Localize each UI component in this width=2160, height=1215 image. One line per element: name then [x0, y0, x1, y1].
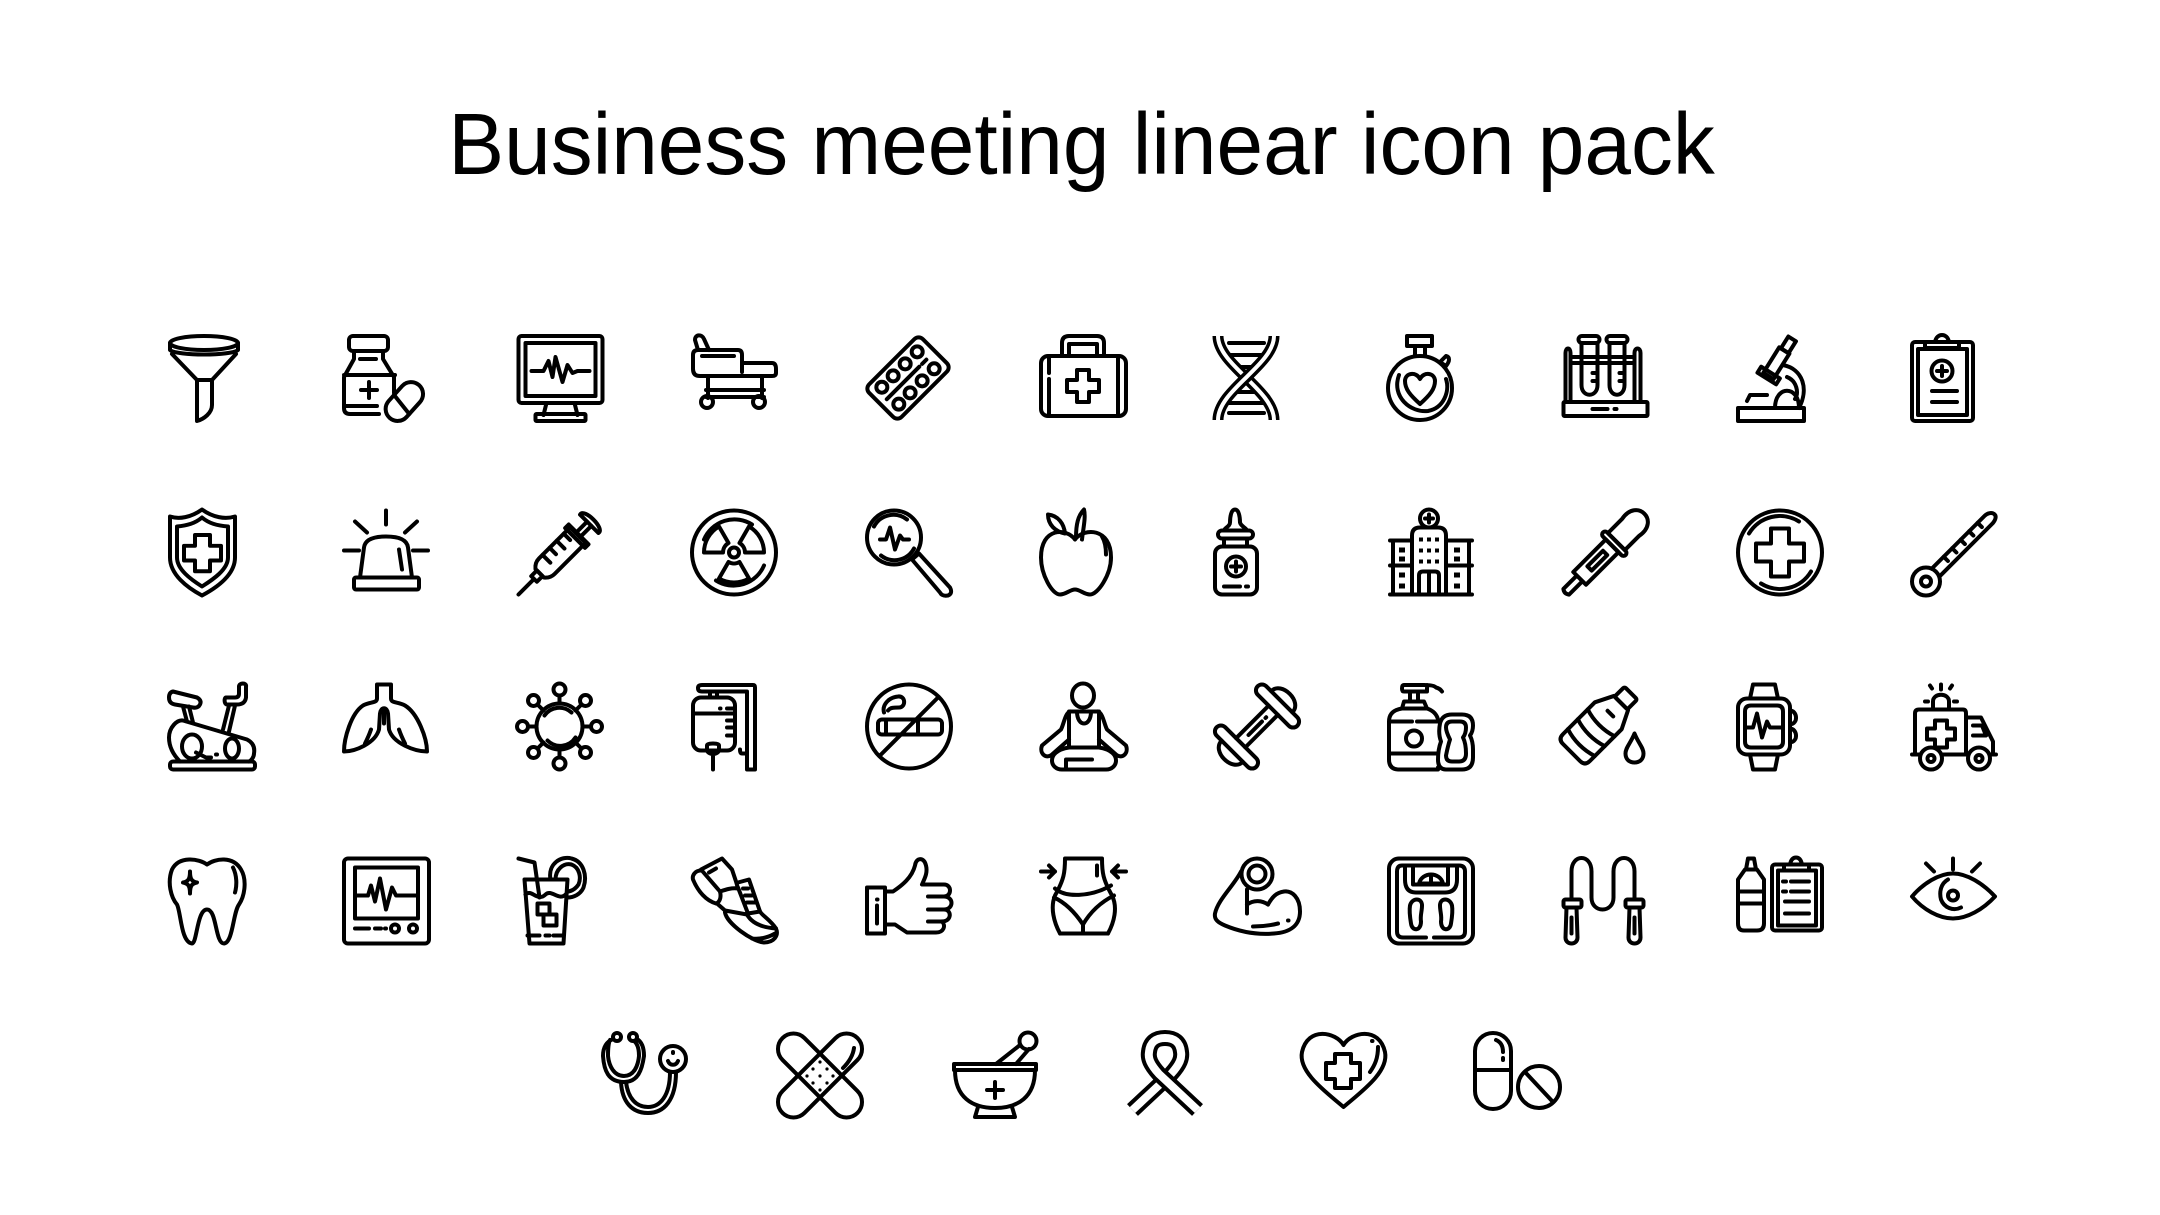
icon: medicine bottle and capsule	[344, 336, 428, 426]
icon: water bottle and checklist	[1738, 858, 1822, 930]
icon: flexed bicep	[1215, 858, 1300, 934]
icon: apple	[1041, 510, 1111, 594]
icon: meditation yoga	[1041, 684, 1127, 770]
icon: first aid kit	[1041, 336, 1126, 416]
icon: lungs	[344, 684, 427, 752]
icon: stethoscope	[603, 1033, 686, 1113]
icon: virus	[517, 684, 602, 770]
icon: dropper bottle	[1215, 510, 1257, 594]
icon: jump rope	[1564, 858, 1644, 944]
icon: microscope	[1738, 333, 1804, 421]
icon: funnel	[170, 336, 238, 421]
icon: thermometer	[1906, 504, 2004, 601]
icon: soap and sponge	[1389, 685, 1473, 770]
icon: medical shield	[170, 510, 235, 596]
icon: lemonade drink	[518, 858, 585, 944]
icon: eye	[1912, 858, 1995, 918]
icon: bathroom scale	[1389, 858, 1473, 944]
icon: mortar and pestle	[954, 1032, 1036, 1117]
icon: tooth	[170, 859, 245, 944]
icon: plus in circle	[1738, 510, 1822, 594]
icon: medical clipboard	[1912, 335, 1973, 421]
icon: capsule and tablet	[1475, 1033, 1560, 1109]
icon: ambulance	[1912, 684, 1996, 770]
icon: running shoe	[693, 858, 777, 942]
icon: smartwatch	[1738, 684, 1796, 770]
icon: heart with cross	[1302, 1034, 1385, 1107]
icon: syringe	[509, 510, 603, 604]
icon: heart monitor screen	[518, 336, 602, 421]
icon: ECG device	[344, 858, 429, 944]
icon: blister pack of pills	[865, 335, 951, 421]
icon: no smoking	[867, 684, 951, 768]
icon: water bottle with drop	[1558, 680, 1644, 766]
icon: test tubes in rack	[1564, 336, 1648, 416]
icon: pipette dropper	[1554, 502, 1656, 604]
icon: radiation sign	[692, 510, 776, 594]
icon: hospital building	[1390, 510, 1472, 594]
icon: magnifying glass with pulse	[867, 510, 951, 596]
icon: crossed bandage	[772, 1027, 868, 1124]
icon: thumbs up	[867, 859, 952, 934]
title: Business meeting linear icon pack	[448, 97, 1715, 193]
icon: siren	[344, 510, 428, 590]
icon: stopwatch with heart	[1388, 336, 1452, 420]
icon: DNA helix	[1218, 336, 1274, 420]
icon: IV drip bag	[693, 685, 755, 770]
icon: awareness ribbon	[1132, 1038, 1198, 1110]
icon: dumbbell	[1204, 674, 1310, 779]
icon: slim waist	[1041, 858, 1126, 934]
icon: hospital bed	[693, 335, 776, 408]
icon: exercise bike	[169, 684, 255, 770]
